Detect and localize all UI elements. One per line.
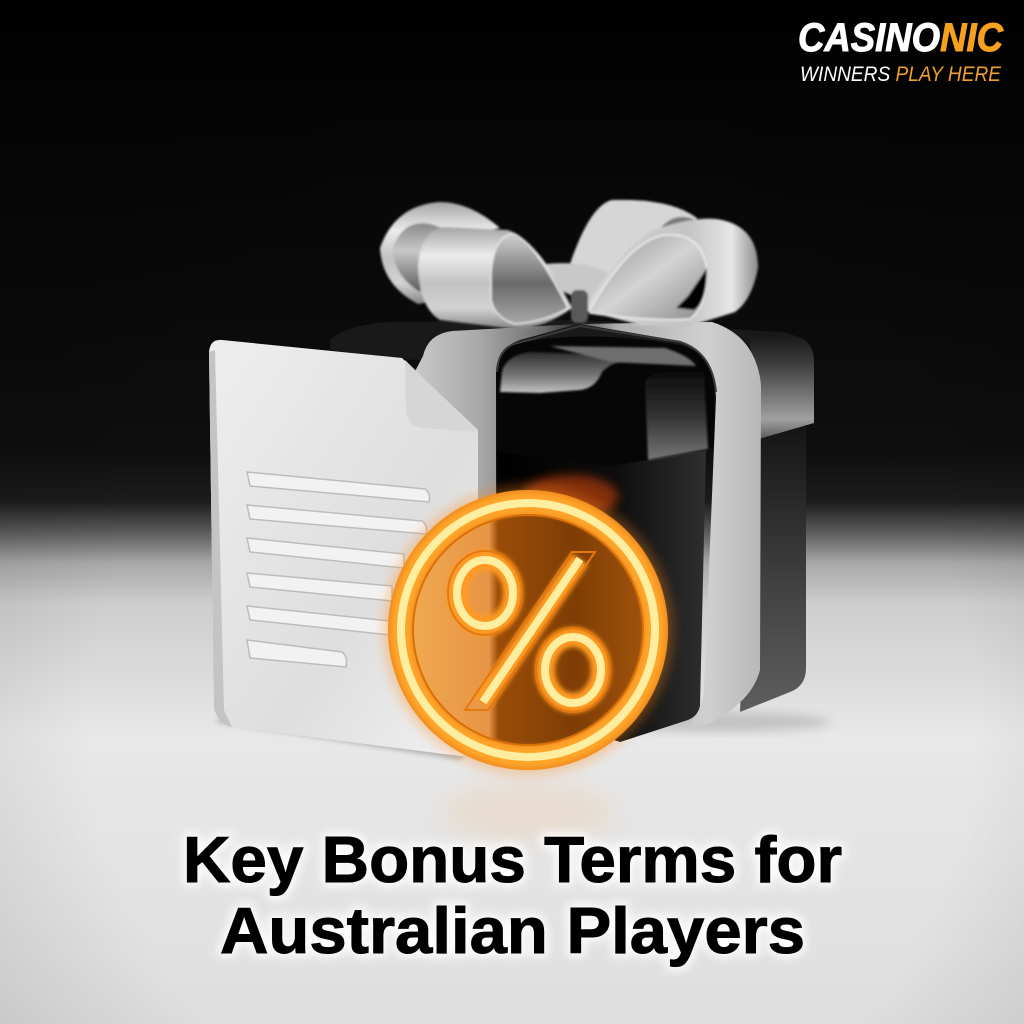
lid right side <box>750 336 814 440</box>
logo wordmark: CASINONIC <box>798 16 1004 60</box>
document thickness edge <box>209 350 232 727</box>
hole right <box>660 248 712 320</box>
lid top surface <box>330 320 808 370</box>
title <box>183 823 842 967</box>
document fold <box>405 360 478 432</box>
document <box>209 340 478 756</box>
lid front right reflection <box>645 372 708 460</box>
lid top shine <box>550 346 696 366</box>
ribbon vertical band <box>580 322 761 727</box>
title halo: Australian Players <box>220 894 805 967</box>
knot <box>571 290 588 323</box>
title halo: Key Bonus Terms for <box>183 823 842 896</box>
orange reflection on box <box>522 475 618 519</box>
lid front left reflection <box>500 352 640 393</box>
bow <box>380 200 758 329</box>
title line 1: Key Bonus Terms for <box>183 823 842 896</box>
front left loop <box>418 227 572 329</box>
percent glyph <box>448 551 610 712</box>
brand logo <box>798 16 1004 86</box>
center bar <box>545 263 610 305</box>
neon percent coin <box>382 484 674 776</box>
back right loop <box>570 200 697 300</box>
title line 2: Australian Players <box>220 894 805 967</box>
back left loop <box>380 202 500 304</box>
floor shadow and coin reflection <box>215 712 830 842</box>
ribbon left band <box>400 324 578 530</box>
box body right side <box>740 425 806 712</box>
ribbon outline <box>497 326 716 392</box>
title halo <box>183 823 842 967</box>
gift box <box>330 320 814 742</box>
document text lines <box>247 472 430 667</box>
dark hole in right loop <box>676 268 707 310</box>
outer neon ring <box>401 503 655 757</box>
lid front black <box>497 336 714 466</box>
box body front <box>497 450 706 742</box>
front right loop <box>583 219 758 326</box>
logo tagline: WINNERS PLAY HERE <box>800 63 1002 86</box>
